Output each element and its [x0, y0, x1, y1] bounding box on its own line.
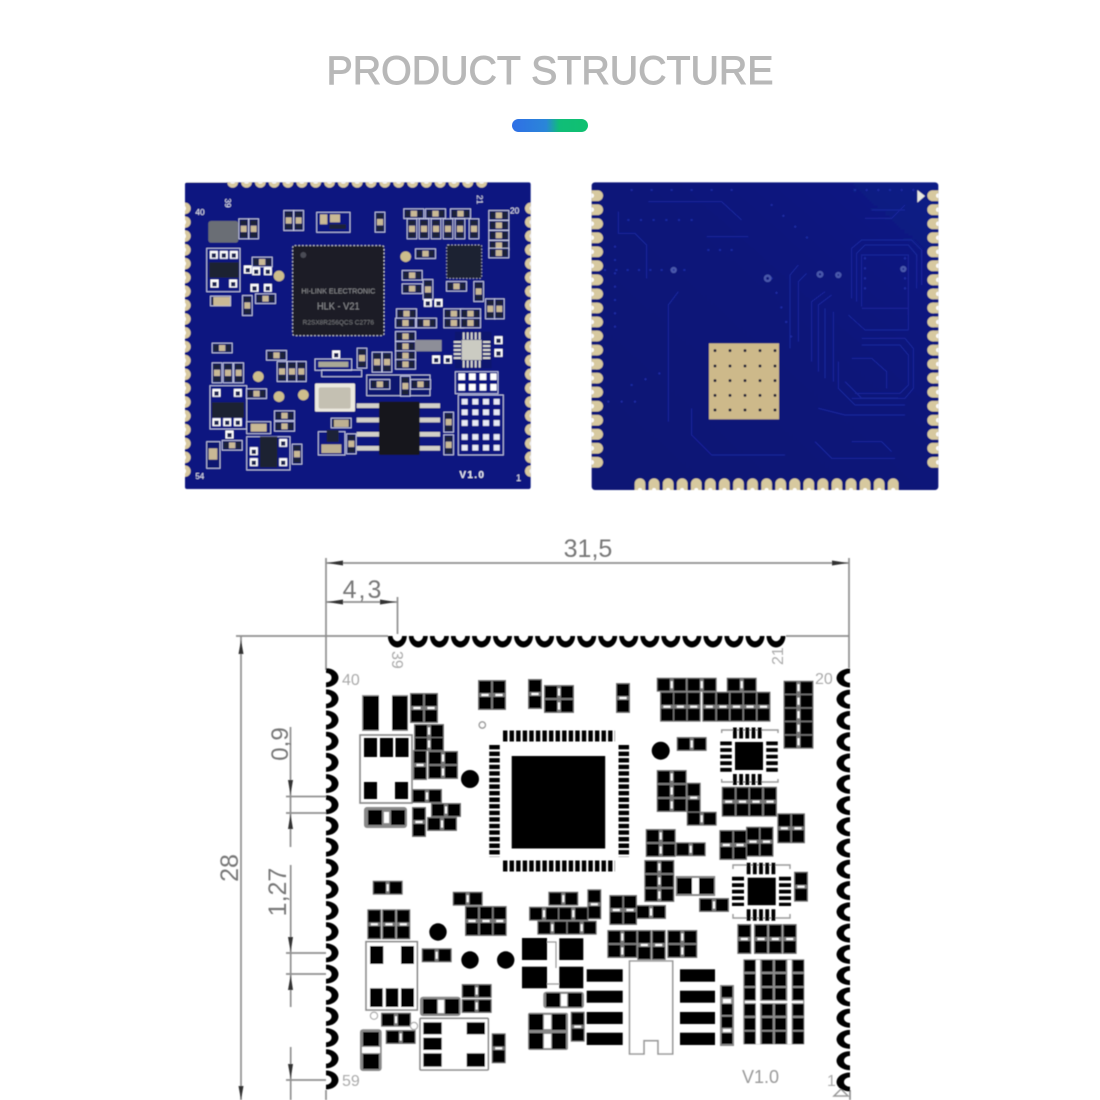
photo: module front: [180, 175, 533, 489]
front: gold vias: [253, 251, 411, 402]
technical drawing: [216, 535, 850, 1100]
castellated pads: left: [326, 668, 338, 1090]
back: ground pad: [709, 343, 779, 419]
front: QFN chip: [455, 332, 492, 368]
front: pad grid: [455, 372, 503, 455]
dimension label: 1,27: 1,27: [264, 868, 292, 916]
dimension label: 28: 28: [216, 854, 244, 882]
footprint: right-centre passives: [644, 737, 805, 912]
pad labels: 20: [815, 671, 833, 688]
front: silkscreen labels: [195, 195, 521, 483]
dimension arrows: [238, 560, 848, 1100]
dimension lines: [236, 558, 850, 1100]
back: vias: [605, 190, 918, 402]
dimension label: 31,5: 31,5: [564, 535, 612, 563]
footprint: pad matrix: [743, 959, 804, 1044]
pad labels: V1.0: [742, 1067, 779, 1087]
back: pin 1 triangle marker: [917, 190, 925, 203]
front: lower-left circuits: [207, 343, 302, 470]
pad labels: 39: [388, 651, 405, 669]
pin 1 marker: [834, 1089, 848, 1096]
front: main chip: HI-LINK ELECTRONIC: [301, 289, 375, 296]
title: PRODUCT STRUCTURE: [326, 49, 774, 93]
front: inductor and left power circuit: [207, 219, 275, 315]
footprint: vertical passive chain: [720, 985, 734, 1046]
title accent bar: [512, 119, 588, 132]
front: silkscreen labels: 1: [516, 473, 521, 483]
footprint: upper QFN chip: [722, 730, 778, 782]
front: crystal: [315, 383, 355, 412]
front: silkscreen labels: 39: [223, 198, 233, 208]
castellated pads: top: [388, 636, 786, 648]
back: copper traces: [618, 202, 922, 458]
pad labels: [342, 647, 836, 1090]
front: small dark chip: [447, 245, 482, 278]
front: silkscreen labels: V1.0: [459, 470, 484, 481]
front: centre components: [266, 348, 430, 396]
footprint: top-right passives: [657, 678, 814, 749]
pad labels: 1: [827, 1073, 836, 1090]
dimension label: 4,3: 4,3: [343, 576, 383, 604]
front: silkscreen labels: 40: [195, 207, 205, 217]
footprint: top-centre passives: [478, 679, 630, 713]
front: SOP8 flash chip: [357, 402, 440, 455]
front: main chip: [293, 246, 384, 336]
front: silkscreen labels: 54: [195, 472, 205, 481]
front: right components: [395, 270, 504, 369]
photo: module back: [592, 182, 938, 490]
pad labels: 59: [342, 1073, 360, 1090]
castellated pads: right: [836, 668, 850, 1092]
front: silkscreen labels: 21: [475, 195, 485, 205]
footprint: lower-left passives: [360, 881, 514, 1071]
front: components under crystal: [318, 412, 453, 455]
front: silkscreen labels: 20: [510, 205, 520, 215]
footprint: upper-left power section: [360, 693, 479, 837]
footprint: main QFN chip: [479, 722, 624, 866]
footprint: lower QFN chip: [733, 865, 808, 918]
footprint: centre-bottom passives: [522, 889, 601, 1050]
front: main chip: R2SX8R256QCS C2776: [303, 319, 374, 326]
dimension label: 0,9: 0,9: [267, 727, 294, 761]
pad labels: 21: [770, 647, 787, 665]
pad labels: 40: [342, 672, 360, 689]
front: top components: [284, 209, 509, 258]
footprint: lower-right passives: [607, 895, 797, 960]
footprint: SOP8 chip: [587, 961, 715, 1054]
front: main chip: HLK - V21: [317, 301, 360, 312]
